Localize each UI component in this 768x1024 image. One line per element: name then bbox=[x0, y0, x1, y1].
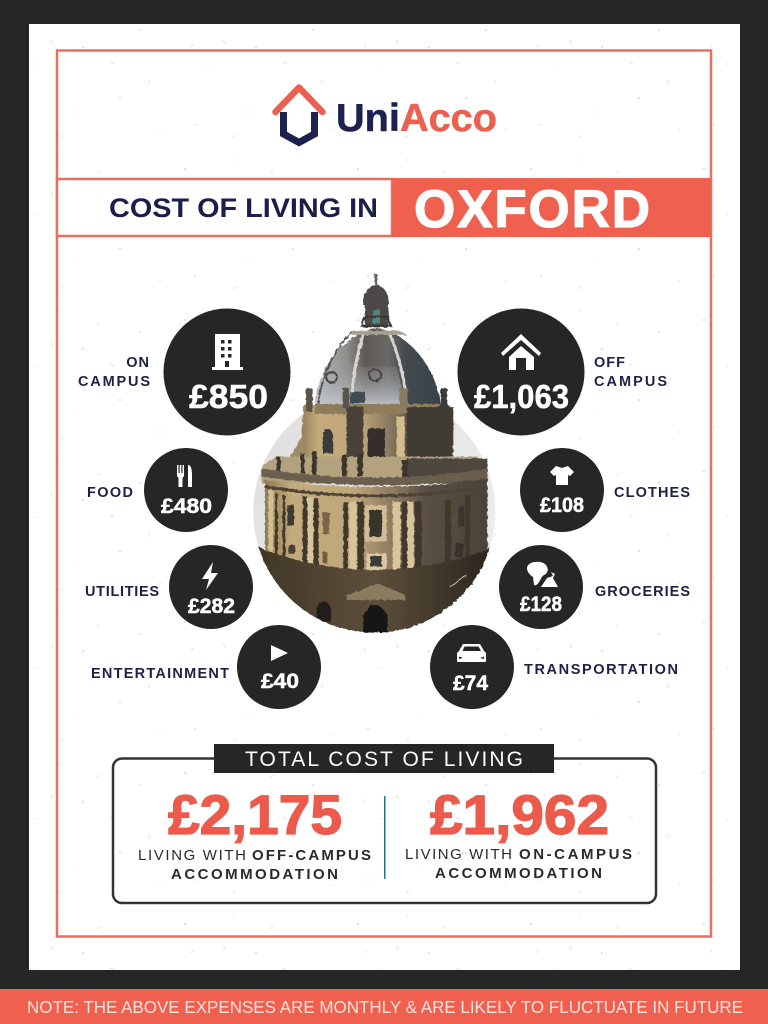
item: clothes bbox=[520, 448, 690, 532]
footer note: NOTE: THE ABOVE EXPENSES ARE MONTHLY & ARE LIKELY TO FLUCTUATE IN FUTURE bbox=[27, 997, 743, 1017]
balustrade bbox=[262, 452, 487, 483]
label: CLOTHES bbox=[614, 485, 690, 501]
heading band bbox=[57, 178, 711, 239]
basement bbox=[258, 546, 490, 634]
icon: lightning bolt bbox=[202, 562, 218, 590]
item: entertainment bbox=[91, 625, 321, 709]
caption: off-campus: ACCOMMODATION bbox=[171, 866, 338, 883]
caption: on-campus: ON-CAMPUS bbox=[519, 846, 632, 863]
total: off-campus: £2,175 bbox=[168, 783, 342, 846]
label line: CAMPUS bbox=[78, 374, 150, 390]
item: food bbox=[87, 448, 228, 532]
icon: play bbox=[271, 645, 288, 661]
label: ON bbox=[126, 355, 150, 371]
icon: house bbox=[501, 334, 541, 370]
icon: fork and knife bbox=[177, 465, 192, 487]
logo: UniAcco bbox=[276, 88, 497, 142]
icon: t-shirt bbox=[550, 466, 574, 485]
label: TRANSPORTATION bbox=[524, 662, 678, 678]
logo wordmark: UniAcco bbox=[336, 97, 497, 140]
icon: vegetables bbox=[527, 562, 558, 587]
orange frame bbox=[57, 50, 711, 936]
lantern bbox=[362, 274, 391, 327]
label line: CAMPUS bbox=[594, 374, 667, 390]
item: groceries bbox=[499, 545, 690, 629]
label: GROCERIES bbox=[595, 584, 690, 600]
panel: total cost of living bbox=[113, 744, 656, 903]
total: on-campus: £1,962 bbox=[430, 783, 609, 846]
item: transportation bbox=[430, 625, 678, 709]
panel title: TOTAL COST OF LIVING bbox=[245, 748, 523, 771]
dome bbox=[315, 328, 441, 405]
heading: cost of living in: COST OF LIVING IN bbox=[109, 193, 378, 223]
item: on campus bbox=[78, 308, 290, 436]
caption: on-campus bbox=[405, 846, 632, 882]
lower drum with columns bbox=[261, 468, 488, 580]
value: £480 bbox=[161, 495, 212, 518]
image: Radcliffe Camera building in circle bbox=[253, 274, 497, 637]
footer note bar bbox=[0, 989, 768, 1024]
item: utilities bbox=[85, 545, 253, 629]
caption: on-campus: LIVING WITH bbox=[405, 846, 512, 863]
value: £74 bbox=[453, 672, 488, 695]
divider bbox=[384, 796, 386, 879]
caption: off-campus: LIVING WITH bbox=[138, 847, 246, 864]
value: £282 bbox=[188, 595, 235, 618]
value: £850 bbox=[189, 378, 268, 415]
icon: building bbox=[212, 334, 243, 370]
value: £128 bbox=[520, 593, 562, 616]
upper drum bbox=[290, 388, 453, 460]
value: £108 bbox=[540, 494, 584, 517]
panel title bar bbox=[214, 744, 554, 773]
caption: off-campus bbox=[138, 847, 371, 883]
heading: Oxford: OXFORD bbox=[414, 180, 650, 239]
label: OFF bbox=[594, 355, 625, 371]
label: ENTERTAINMENT bbox=[91, 666, 229, 682]
label: UTILITIES bbox=[85, 584, 159, 600]
label: FOOD bbox=[87, 485, 133, 501]
caption: off-campus: OFF-CAMPUS bbox=[252, 847, 371, 864]
value: £40 bbox=[261, 670, 299, 693]
icon: car bbox=[457, 644, 486, 662]
icon: house logo bbox=[276, 88, 322, 142]
caption: on-campus: ACCOMMODATION bbox=[435, 865, 602, 882]
item: off campus bbox=[458, 308, 667, 436]
value: £1,063 bbox=[474, 378, 569, 415]
